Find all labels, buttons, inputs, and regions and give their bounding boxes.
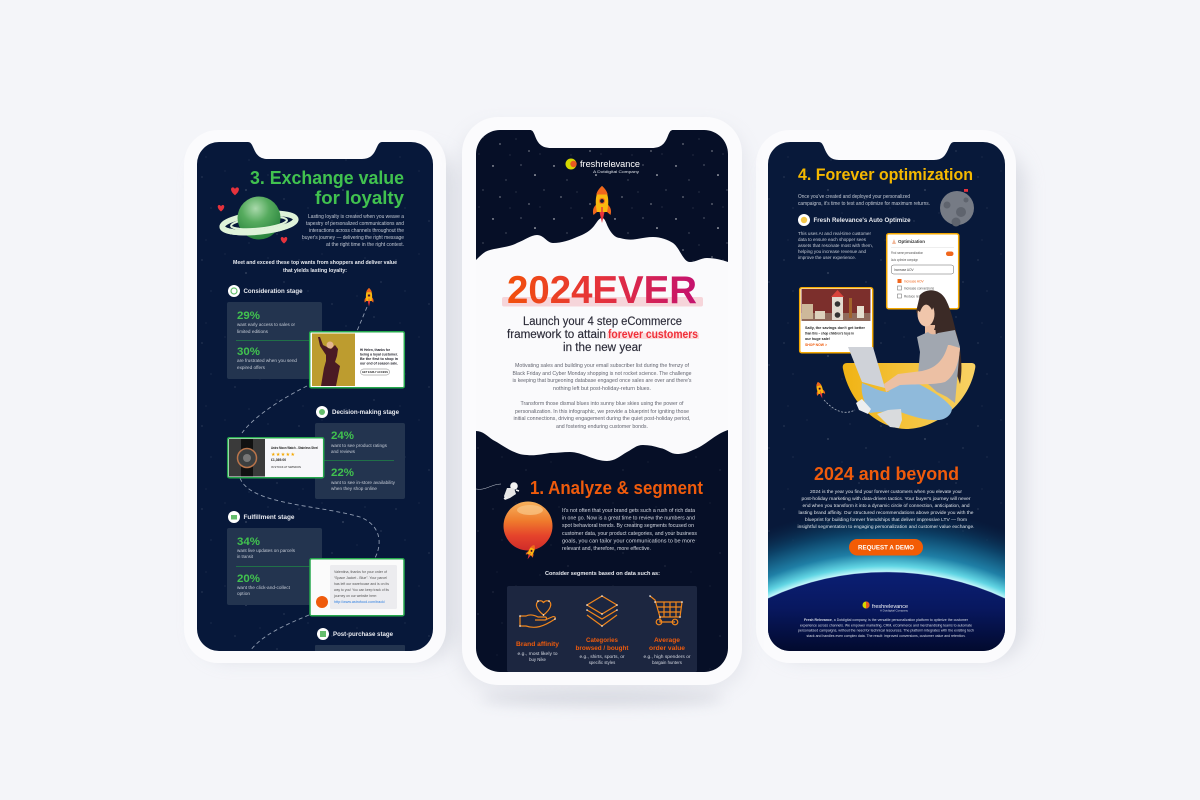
labels: segment text: e.g., shirts, sports, or (580, 654, 625, 659)
button: request a demo: REQUEST A DEMO (858, 544, 914, 552)
icon: small rocket by planet (524, 544, 538, 561)
panel: consideration stats: are frustrated when you send (237, 358, 297, 364)
card: delivery SMS message: http://www.astrofood.com/track/ (334, 600, 385, 604)
illustration: woman with laptop on yellow bowl (843, 290, 975, 429)
logo: fresh relevance footer: A Dotdigital Company (880, 610, 909, 612)
panel: fulfillment stats: 34% (237, 536, 260, 548)
card: product rating: £1,369.00 (271, 458, 286, 462)
card: toy sale email: than this – shop children's toys in (805, 332, 855, 336)
card: optimization settings UI: Increase AOV (894, 268, 915, 272)
labels: segment text: Average (654, 637, 681, 644)
panel: center phone (458, 117, 746, 706)
text block: loyalty intro: Lasting loyalty is created when you weave a (308, 214, 404, 220)
heading: fulfillment stage: Fulfillment stage (244, 514, 295, 521)
panel: fulfillment stats: 20% (237, 573, 260, 585)
text block: introduction: is keeping that burgeoning database engaged once sales are over and there's (512, 378, 692, 384)
panel: consideration stats: expired offers (237, 365, 266, 371)
text block: analyze and segment: customer data, your product categories, and your business (562, 531, 698, 537)
text block: 2024 and beyond: insightful segmentation to engaging personalization and customer value exchange. (798, 524, 974, 530)
heading: post-purchase stage (317, 628, 394, 640)
text block: 2024 and beyond: 2024 is the year you find your forever customers when you elevate your (810, 489, 962, 495)
text block: optimization intro: Once you've created and deployed your personalized (798, 194, 910, 200)
panel: consideration stats: 29% (237, 310, 260, 322)
button: request a demo (849, 539, 923, 556)
text block: analyze and segment: goals, you can tailor your communications to be more (562, 539, 695, 545)
title: 2024EVER: 2024EVER (507, 269, 697, 312)
labels: segment text: order value (649, 645, 686, 652)
panel: fulfillment stats: want the click-and-collect (237, 585, 291, 591)
text block: 2024 and beyond: post-holiday marketing with data-driven tactics. Your buyer's journey will never (802, 496, 971, 502)
card: early access popup: being a loyal customer. (360, 352, 398, 356)
heading: consideration stage (228, 285, 303, 297)
text block: auto optimize description: improve the user experience. (798, 255, 856, 261)
heading: Fresh Relevance's Auto Optimize: Fresh Relevance's Auto Optimize (814, 218, 911, 224)
card: optimization settings UI: Auto optimize campaign (891, 258, 918, 262)
card: optimization settings UI: Reduce returns (904, 294, 926, 298)
logo: fresh relevance: A Dotdigital Company (593, 169, 639, 174)
screen: exchange value for loyalty (197, 142, 433, 652)
text block: 2024 and beyond: lasting brand affinity. Our structured recommendations above provide you with the (798, 510, 974, 516)
text block: analyze and segment: spot behavioral trends. By creating segments focused on (562, 523, 694, 529)
text block: introduction: Black Friday and Cyber Monday shopping is not rocket science. The challenge (512, 371, 692, 377)
text block: meet and exceed: that yields lasting loyalty: (283, 268, 347, 274)
text block: analyze and segment (562, 508, 698, 552)
icon: astronaut on tether (476, 482, 519, 500)
text block: loyalty intro: tapestry of personalized communications and (306, 221, 404, 227)
heading: consideration stage: Consideration stage (244, 288, 303, 295)
background: planet horizon glow (768, 516, 1005, 651)
text block: analyze and segment: It's not often that your brand gets such a rush of rich data (562, 508, 695, 514)
text block: introduction: Motivating sales and building your email subscriber list during the frenzy of (515, 363, 690, 369)
panel: decision-making stats: want to see in-store availability (331, 480, 396, 486)
subtitle: in the new year (563, 342, 642, 354)
heading: 3. Exchange value for loyalty (250, 167, 405, 208)
panel: decision-making stats: want to see product ratings (331, 443, 388, 449)
text block: about fresh relevance (798, 618, 974, 638)
subtitle: framework to attain (507, 329, 606, 341)
logo: fresh relevance (566, 158, 640, 174)
panel: decision-making stats (315, 423, 405, 499)
dashed journey path (240, 307, 379, 651)
text block: introduction: nothing left but post-holiday-return blues. (553, 386, 651, 392)
text block: loyalty intro (302, 214, 404, 248)
card: toy sale email (800, 288, 873, 353)
card: optimization settings UI: Find name personalization (891, 251, 923, 255)
text block: meet and exceed: Meet and exceed these top wants from shoppers and deliver value (233, 260, 397, 266)
labels: segment text: Categories (586, 637, 618, 644)
text block: auto optimize description: data to ensure each shopper sees (798, 237, 867, 243)
card: delivery SMS message: Valentina, thanks for your order of (334, 570, 387, 574)
text block: analyze and segment: relevant and, therefore, more effective. (562, 546, 651, 552)
heading: 3. Exchange value for loyalty: for loyalty (315, 187, 405, 208)
icon: stacked layers (586, 595, 618, 627)
panel: decision-making stats: when they shop online (331, 486, 377, 492)
heading: decision-making stage (316, 406, 400, 418)
icon: green ringed planet with hearts (218, 187, 297, 244)
text block: 2024 and beyond: blueprint for building forever friendships that deliver impressive LTV — from (805, 517, 967, 523)
labels: segment text (516, 637, 691, 665)
subtitle (507, 316, 699, 354)
heading: 2024 and beyond: 2024 and beyond (814, 464, 959, 484)
card: delivery SMS message (310, 559, 404, 616)
card: delivery SMS message: has left our warehouse and is on its (334, 582, 389, 586)
panel: consideration stats: 30% (237, 346, 260, 358)
dashed flight path (824, 400, 855, 412)
heading: Fresh Relevance's Auto Optimize (798, 214, 911, 226)
card: product rating: IN STOCK AT SWINDON (271, 465, 301, 469)
card: toy sale email: our huge sale! (805, 337, 830, 341)
labels: segment text: e.g., most likely to (518, 651, 558, 656)
text block: 2024 and beyond (798, 489, 974, 530)
heading: 3. Exchange value for loyalty: 3. Exchange value (250, 167, 404, 188)
heading: 1. Analyze & segment: 1. Analyze & segment (530, 478, 703, 498)
card: early access popup: Hi Helen, thanks for (360, 348, 390, 352)
icon: launching rocket (593, 186, 611, 223)
text block: optimization intro (798, 194, 930, 207)
labels: segment text: Brand affinity (516, 641, 560, 648)
text block: auto optimize description (798, 231, 873, 261)
text block: introduction: and fostering enduring customer bonds. (556, 424, 648, 430)
panel: decision-making stats: and reviews (331, 449, 356, 455)
panel: decision-making stats: 24% (331, 430, 354, 442)
white cloud and content background (476, 218, 728, 461)
panel: fulfillment stats: want live updates on parcels (237, 548, 296, 554)
text block: about fresh relevance: personalized campaigns, without the need for technical resources. The platform integrates with the existing tech (798, 629, 974, 633)
icon: shopping cart (649, 595, 683, 625)
card: product rating: ★★★★★ (271, 452, 296, 458)
logo: fresh relevance footer: freshrelevance (872, 604, 908, 610)
card: product rating: Astro Moon Watch - Stainless Steel (271, 446, 318, 450)
card: delivery SMS message: “Space Jacket - Blue”. Your parcel (334, 576, 387, 580)
text block: analyze and segment: in one go. Now is a great time to review the numbers and (562, 515, 695, 521)
card: optimization settings UI: Increase AOV (904, 280, 925, 284)
text block: auto optimize description: helping you increase revenue and (798, 249, 866, 255)
text block: optimization intro: campaigns, it's time to test and optimize for maximum returns. (798, 201, 930, 207)
labels: segment text: specific styles (589, 660, 615, 665)
text block: loyalty intro: at the right time in the right context. (326, 242, 404, 248)
panel: right phone (756, 130, 1026, 663)
subtitle: forever customers (608, 329, 698, 341)
panel: consideration stats: want early access to sales or (237, 322, 295, 328)
text block: about fresh relevance: experience across channels. We empower marketing, CRM, eCommerce and merchandising teams to automate (800, 623, 972, 627)
card: early access popup: our end of season sale. (360, 362, 398, 366)
text block: 2024 and beyond: end when you transform it into a dynamic circle of connection, anticipation, and (802, 503, 970, 509)
panel: segment types (507, 586, 697, 672)
screen: forever optimization (768, 142, 1005, 651)
heading: fulfillment stage (228, 511, 295, 523)
text block: consider segments: Consider segments based on data such as: (545, 571, 660, 577)
logo: fresh relevance footer (862, 602, 909, 612)
card: delivery SMS message: journey on our website here: (333, 594, 377, 598)
panel: fulfillment stats: option (237, 591, 250, 597)
card: delivery SMS message: way to you! You can keep track of its (334, 588, 389, 592)
panel: consideration stats (227, 302, 322, 379)
screen: launch and analyze (476, 130, 728, 672)
text block: introduction (512, 363, 692, 430)
text block: about fresh relevance: Fresh Relevance , a Dotdigital company, is the versatile personalization platform to optimize the customer (804, 618, 969, 622)
panel: decision-making stats: 22% (331, 467, 354, 479)
card: toy sale email: Sally, the savings don't get better (805, 326, 866, 330)
heading: decision-making stage: Decision-making stage (332, 409, 400, 416)
panel: consideration stats: limited editions (237, 329, 269, 335)
card: early access popup: GET EARLY ACCESS (362, 370, 388, 374)
icon: hand holding heart (519, 600, 556, 627)
card: optimization settings UI: Increase conversions (904, 286, 935, 290)
labels: segment text: e.g., high spenders or (644, 654, 691, 659)
icon: moon with flag (940, 189, 974, 226)
icon: small rocket (364, 288, 374, 306)
card: optimization settings UI (887, 234, 959, 309)
text block: introduction: Transform those dismal blues into sunny blue skies using the power of (520, 401, 684, 407)
card: toy sale email: SHOP NOW > (805, 343, 827, 347)
text block: auto optimize description: This uses AI and real-time customer (798, 231, 871, 237)
card: product rating (228, 438, 324, 478)
labels: segment text: bargain hunters (652, 660, 682, 665)
card: early access popup: Be the first to shop in (360, 357, 399, 361)
text block: introduction: personalization. In this infographic, we provide a blueprint for igniting those (515, 409, 689, 415)
text block: loyalty intro: buyer's journey — delivering the right message (302, 235, 404, 241)
text block: meet and exceed (233, 260, 397, 274)
panel: fulfillment stats: in transit (237, 554, 254, 560)
panel: left phone (184, 130, 458, 663)
card: optimization settings UI: Optimization (898, 239, 925, 244)
icon: orange planet (504, 502, 552, 550)
subtitle: Launch your 4 step eCommerce (523, 316, 682, 328)
panel: post-purchase stats (315, 645, 405, 651)
text block: loyalty intro: interactions across channels throughout the (309, 228, 404, 234)
icon: tilted rocket (816, 382, 826, 398)
heading: post-purchase stage: Post-purchase stage (333, 631, 394, 638)
text block: about fresh relevance: stack and handles even complex data. The result: improved conversions, customer value and retention. (806, 634, 966, 638)
text block: introduction: initial connections, driving engagement during the quiet post-holiday period, (514, 416, 690, 422)
labels: segment text: browsed / bought (576, 645, 629, 652)
card: early access popup (310, 332, 404, 388)
text block: auto optimize description: assets that resonate most with them, (798, 243, 873, 249)
labels: segment text: buy Nike (529, 657, 546, 662)
heading: 4. Forever optimization: 4. Forever optimization (798, 165, 973, 184)
logo: fresh relevance: freshrelevance (580, 159, 640, 169)
panel: fulfillment stats (227, 528, 322, 605)
